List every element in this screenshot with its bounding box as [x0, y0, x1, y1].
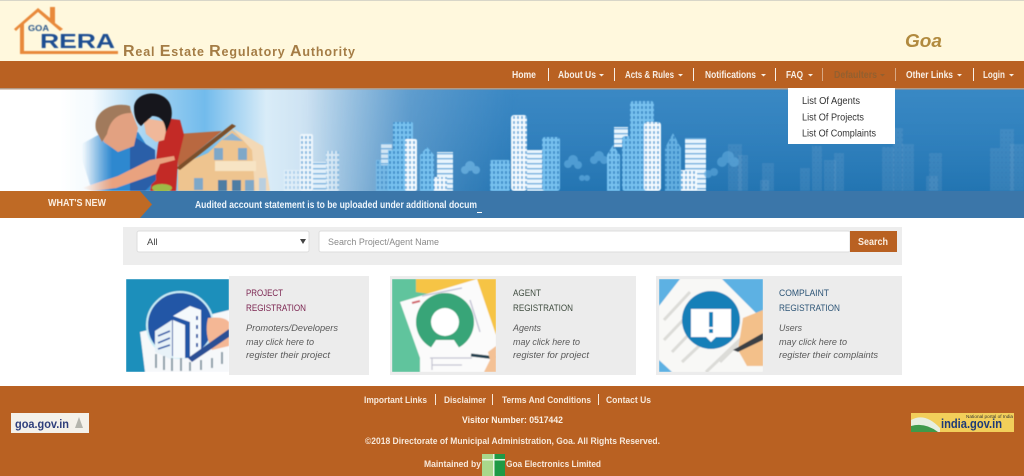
card title: AGENT [513, 288, 541, 299]
card title [246, 288, 306, 314]
banner illustration [0, 88, 1024, 192]
house [176, 124, 270, 191]
menu item: Other Links: Other Links [906, 70, 953, 81]
search input: Search Project/Agent Name [328, 237, 439, 248]
card description [512, 323, 589, 361]
card title: COMPLAINT [779, 288, 829, 299]
faint skyline right [728, 128, 1024, 191]
badge: india.gov.in: National portal of India [966, 414, 1014, 419]
copyright: ©2018 Directorate of Municipal Administration, Goa. All Rights Reserved. [365, 436, 660, 447]
menu item: Acts and Rules: Acts & Rules [625, 70, 674, 81]
people and house illustration [78, 93, 270, 192]
footer [0, 386, 1024, 476]
what's new label: WHAT'S NEW [48, 198, 107, 209]
search input [319, 231, 850, 252]
visitor counter: Visitor Number: 0517442 [462, 415, 563, 426]
header band [0, 0, 1024, 61]
footer links: Important Links [364, 395, 427, 406]
card title: REGISTRATION [246, 303, 306, 314]
dropdown menu: Defaulters: List Of Projects [802, 112, 864, 124]
navigation bar [0, 61, 1024, 88]
card title: PROJECT [246, 288, 283, 299]
state name: Goa [905, 31, 942, 51]
icon: Goa Electronics logo [482, 454, 505, 476]
card: complaint registration [656, 276, 902, 375]
menu item: FAQ: FAQ [786, 70, 803, 81]
search button [850, 231, 897, 252]
ticker text: Audited account statement is to be uploaded under additional docum [195, 200, 477, 211]
card description: may click here to [246, 337, 314, 348]
card description: register their project [246, 350, 330, 361]
card: project registration [123, 276, 369, 375]
card description: register their complaints [779, 350, 878, 361]
menu item: About Us: About Us [558, 70, 596, 81]
footer links: Contact Us [606, 395, 651, 406]
menu item: Defaulters (active): Defaulters [834, 70, 877, 81]
skyline left white [284, 134, 339, 191]
icon: complaint alert on document [659, 279, 763, 372]
card description: register for project [513, 350, 589, 361]
man [78, 132, 175, 191]
tagline: Real Estate Regulatory Authority [123, 43, 355, 60]
card description [246, 323, 338, 361]
what's new label [0, 191, 152, 218]
category select: All [147, 237, 158, 248]
footer links: Disclaimer [444, 395, 486, 406]
card title [779, 288, 840, 314]
skyline centre [490, 101, 739, 191]
icon: agent profile on document [392, 279, 496, 372]
maintained by [424, 454, 601, 476]
footer links [364, 394, 651, 406]
search panel [123, 227, 902, 265]
menu item: Notifications: Notifications [705, 70, 756, 81]
logo: Goa RERA house: RERA [40, 31, 115, 53]
dropdown menu: Defaulters: List Of Complaints [802, 128, 876, 140]
badge: india.gov.in [911, 413, 1014, 432]
card title: REGISTRATION [513, 303, 573, 314]
dropdown menu: Defaulters: List Of Agents [802, 96, 860, 107]
card description: Agents [512, 323, 541, 334]
what's new ticker [0, 191, 1024, 218]
card: agent registration [390, 276, 636, 375]
card description: may click here to [779, 337, 847, 348]
card title: REGISTRATION [779, 303, 840, 314]
badge: goa.gov.in: goa.gov.in [15, 417, 69, 431]
icon: building on document [126, 279, 229, 372]
logo: Goa RERA house: GOA [28, 24, 49, 33]
menu item: Home: Home [512, 70, 536, 81]
card title [513, 288, 573, 314]
logo: Goa RERA house [14, 7, 118, 54]
badge: india.gov.in: india.gov.in [941, 416, 1002, 431]
search button: Search [858, 237, 888, 248]
card description: Users [779, 323, 802, 334]
card description: Promoters/Developers [246, 323, 338, 334]
woman [134, 93, 184, 191]
card description [779, 323, 878, 361]
menu item: Login: Login [983, 70, 1005, 81]
maintained by: Maintained by [424, 459, 482, 470]
footer links: Terms And Conditions [502, 395, 591, 406]
badge: goa.gov.in [11, 413, 89, 433]
card description: may click here to [513, 337, 580, 348]
category select [137, 231, 309, 252]
dropdown menu: Defaulters [788, 88, 895, 144]
maintained by: Goa Electronics Limited [506, 459, 601, 470]
